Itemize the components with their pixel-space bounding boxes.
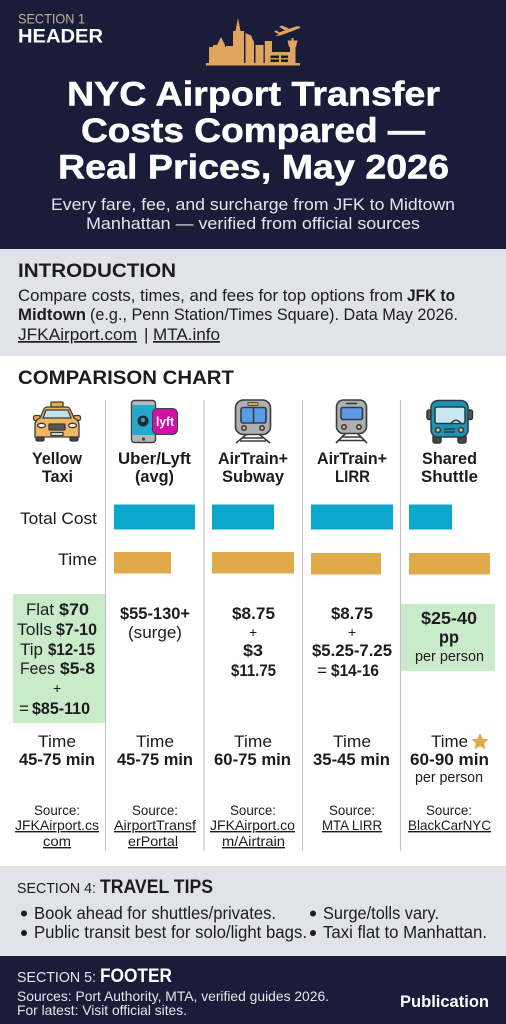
time: yellow taxi: 45-75 min	[19, 750, 95, 769]
time: yellow taxi: Time	[38, 732, 76, 751]
column: uber/lyft	[114, 400, 196, 849]
cost breakdown: yellow taxi: $7-10	[56, 620, 97, 639]
icon: city skyline with airport and plane	[206, 18, 300, 66]
icon: phone with lyft badge	[132, 400, 178, 442]
heading: footer: FOOTER	[100, 966, 172, 987]
panel: introduction	[0, 249, 506, 356]
icon: train	[236, 400, 270, 443]
bar chart: time: Time	[58, 550, 97, 569]
title: NYC Airport Transfer	[67, 76, 440, 114]
icon: taxi	[34, 402, 80, 441]
list: tips	[21, 903, 487, 942]
cost: airtrain + subway	[231, 604, 276, 680]
source: airtrain + lirr	[322, 802, 382, 833]
bar chart: total cost: Total Cost	[20, 509, 97, 528]
label: shared shuttle	[421, 449, 478, 486]
section label: header: HEADER	[18, 26, 103, 48]
source: shared shuttle	[408, 802, 491, 833]
label: shared shuttle: Shuttle	[421, 467, 478, 486]
cost breakdown: yellow taxi: $5-8	[60, 659, 95, 678]
heading: comparison chart: COMPARISON CHART	[18, 368, 234, 389]
heading: travel tips: SECTION 4:	[17, 880, 96, 897]
time: airtrain + subway	[214, 732, 291, 769]
source: airtrain + lirr: Source:	[329, 802, 375, 818]
source: airtrain + lirr: MTA LIRR	[322, 817, 382, 833]
cost breakdown: yellow taxi: Tip	[20, 640, 43, 659]
subtitle: Every fare, fee, and surcharge from JFK to Midtown	[51, 195, 455, 214]
text block: introduction body: MTA.info	[153, 325, 220, 344]
source: uber/lyft: erPortal	[128, 833, 178, 849]
label: yellow taxi: Yellow	[32, 449, 83, 468]
list: tips: Book ahead for shuttles/privates.	[34, 903, 276, 923]
source: yellow taxi: Source:	[34, 802, 80, 818]
cost: airtrain + lirr: $8.75	[331, 604, 373, 623]
time: shared shuttle: per person	[415, 769, 483, 786]
heading: travel tips	[17, 877, 213, 898]
panel: travel tips	[0, 866, 506, 956]
text block: introduction body: JFKAirport.com	[18, 325, 137, 344]
source: yellow taxi: JFKAirport.cs	[15, 817, 99, 833]
time: yellow taxi	[19, 732, 95, 769]
text block: footer sources: Sources: Port Authority, MTA, verified guides 2026.	[17, 988, 329, 1004]
time: uber/lyft: 45-75 min	[117, 750, 193, 769]
text block: footer sources: For latest: Visit official sites.	[17, 1002, 187, 1018]
text block: introduction body: Midtown	[18, 305, 86, 324]
cost breakdown: yellow taxi: $12-15	[48, 640, 95, 659]
cost: shared shuttle: per person	[415, 648, 484, 665]
cost: airtrain + lirr	[312, 604, 392, 680]
cost: airtrain + lirr: $14-16	[331, 661, 379, 680]
cost breakdown: yellow taxi: Flat	[26, 600, 54, 619]
cost breakdown: yellow taxi: +	[53, 680, 61, 696]
list: tips: Taxi flat to Manhattan.	[323, 922, 487, 942]
time: uber/lyft: Time	[136, 732, 174, 751]
cost: shared shuttle	[401, 604, 495, 671]
panel: footer	[0, 956, 506, 1024]
source: uber/lyft: AirportTransf	[114, 817, 196, 833]
time: uber/lyft	[117, 732, 193, 769]
source: shared shuttle: Source:	[426, 802, 472, 818]
list: tips: Public transit best for solo/light bags.	[34, 922, 307, 942]
cost: uber/lyft	[120, 604, 190, 642]
publication label: Publication	[400, 992, 489, 1011]
label: yellow taxi: Taxi	[42, 467, 73, 486]
cost: uber/lyft: (surge)	[128, 623, 182, 642]
text block: introduction body	[18, 286, 458, 344]
bar chart: total cost	[20, 504, 452, 530]
heading: introduction: INTRODUCTION	[18, 261, 176, 282]
title	[58, 76, 449, 186]
cost breakdown: yellow taxi: $85-110	[32, 699, 90, 718]
cost: shared shuttle: $25-40	[421, 608, 477, 628]
time: shared shuttle	[410, 732, 489, 786]
time: airtrain + subway: Time	[234, 732, 272, 751]
text block: introduction body: (e.g., Penn Station/Times Square). Data May 2026.	[90, 305, 458, 324]
cost breakdown: yellow taxi: Fees	[20, 659, 55, 678]
column: shared shuttle	[401, 400, 495, 833]
section label: header	[18, 10, 103, 48]
cost breakdown: yellow taxi: $70	[59, 600, 89, 619]
source: shared shuttle: BlackCarNYC	[408, 817, 491, 833]
icon: bus	[427, 400, 472, 443]
source: uber/lyft	[114, 802, 196, 849]
text block: footer sources	[17, 988, 329, 1018]
subtitle: Manhattan — verified from official sources	[86, 214, 420, 233]
section label: header: SECTION 1	[18, 10, 85, 26]
cost: airtrain + lirr: =	[317, 661, 327, 680]
cost: airtrain + subway: $8.75	[232, 604, 275, 623]
icon: phone with lyft badge: lyft	[156, 414, 175, 429]
time: airtrain + lirr	[313, 732, 390, 769]
label: uber/lyft: (avg)	[135, 467, 174, 486]
icon: star	[471, 733, 489, 749]
cost breakdown: yellow taxi: =	[19, 699, 29, 718]
cost: shared shuttle: pp	[439, 627, 459, 647]
cost: airtrain + subway: +	[249, 624, 257, 640]
source: airtrain + subway	[210, 802, 295, 849]
panel: header	[0, 0, 506, 249]
source: airtrain + subway: Source:	[230, 802, 276, 818]
subtitle	[51, 195, 455, 233]
label: airtrain + subway: Subway	[222, 467, 285, 486]
title: Costs Compared —	[81, 112, 425, 150]
cost: airtrain + subway: $3	[243, 641, 263, 660]
time: airtrain + subway: 60-75 min	[214, 750, 291, 769]
source: airtrain + subway: JFKAirport.co	[210, 817, 295, 833]
label: airtrain + lirr	[317, 449, 387, 486]
label: airtrain + subway: AirTrain+	[218, 449, 288, 468]
cost: airtrain + subway: $11.75	[231, 661, 276, 680]
heading: travel tips: TRAVEL TIPS	[100, 877, 213, 898]
time: airtrain + lirr: 35-45 min	[313, 750, 390, 769]
column: yellow taxi	[13, 402, 105, 849]
heading: footer	[17, 966, 172, 987]
label: airtrain + subway	[218, 449, 288, 486]
source: yellow taxi: com	[43, 833, 71, 849]
cost: uber/lyft: $55-130+	[120, 604, 190, 623]
label: yellow taxi	[32, 449, 83, 486]
heading: footer: SECTION 5:	[17, 969, 96, 986]
cost: airtrain + lirr: $5.25-7.25	[312, 641, 392, 660]
time: shared shuttle: Time	[431, 732, 468, 751]
time: shared shuttle: 60-90 min	[410, 750, 489, 769]
source: airtrain + subway: m/Airtrain	[222, 833, 285, 849]
column: airtrain + lirr	[312, 400, 392, 833]
source: uber/lyft: Source:	[132, 802, 178, 818]
text block: introduction body: JFK to	[407, 286, 455, 305]
icon: train	[336, 400, 367, 443]
time: airtrain + lirr: Time	[333, 732, 371, 751]
title: Real Prices, May 2026	[58, 148, 449, 186]
column: airtrain + subway	[210, 400, 295, 849]
text block: introduction body: Compare costs, times, and fees for top options from	[18, 286, 403, 305]
label: airtrain + lirr: AirTrain+	[317, 449, 387, 468]
label: airtrain + lirr: LIRR	[335, 467, 370, 486]
label: shared shuttle: Shared	[422, 449, 477, 468]
label: uber/lyft: Uber/Lyft	[118, 449, 191, 468]
cost breakdown: yellow taxi: Tolls	[17, 620, 52, 639]
source: yellow taxi	[15, 802, 99, 849]
cost breakdown: yellow taxi	[13, 594, 105, 723]
text block: introduction body: |	[144, 325, 148, 344]
label: uber/lyft	[118, 449, 191, 486]
cost: airtrain + lirr: +	[348, 624, 356, 640]
bar chart: time	[58, 550, 490, 574]
list: tips: Surge/tolls vary.	[323, 903, 439, 923]
